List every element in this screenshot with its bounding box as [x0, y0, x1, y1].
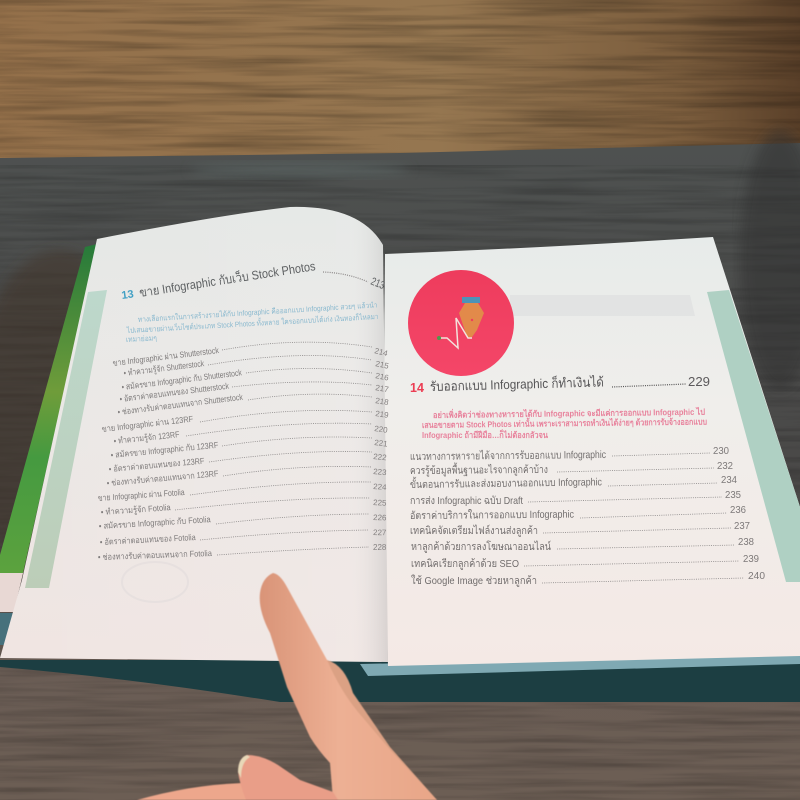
contents list chapter 13: • ทำความรู้จัก Shutterstock	[123, 358, 205, 379]
contents list chapter 13: • ช่องทางรับค่าตอบแทนจาก Shutterstock	[117, 392, 244, 417]
hand: pointing finger	[137, 573, 437, 800]
contents list chapter 14: ใช้ Google Image ช่วยหาลูกค้า	[411, 574, 537, 587]
contents list chapter 13: 224	[373, 482, 387, 492]
contents list chapter 13: 223	[373, 467, 387, 477]
right page tab strip	[707, 290, 800, 582]
contents list chapter 14: เทคนิคเรียกลูกค้าด้วย SEO	[411, 557, 519, 570]
contents list chapter 13	[97, 342, 390, 562]
contents list chapter 13: 214	[374, 346, 389, 358]
contents list chapter 13: • อัตราค่าตอบแทนของ Fotolia	[100, 532, 196, 547]
right page contents	[410, 372, 765, 587]
chapter 13 intro: ไปเสนอขายผ่านเว็บไซต์ประเภท Stock Photos ทั้งหลาย ใครออกแบบได้เก่ง เงินทองก็ไหลมา	[126, 311, 379, 335]
contents list chapter 14: 230	[713, 446, 729, 457]
faint show-through	[510, 295, 695, 316]
contents list chapter 13: • อัตราค่าตอบแทนของ 123RF	[108, 456, 205, 474]
chapter 13 heading: 213	[369, 276, 386, 292]
contents list chapter 14: 234	[721, 475, 737, 486]
chapter 13 heading: ขาย Infographic กับเว็บ Stock Photos	[138, 258, 316, 300]
chapter 13 intro: ทางเลือกแรกในการสร้างรายได้กับ Infographic คือออกแบบ Infographic สวยๆ แล้วนำ	[138, 300, 378, 324]
faint watermark blob	[122, 562, 188, 602]
chapter 14 intro	[422, 405, 707, 440]
contents list chapter 13: • ช่องทางรับค่าตอบแทนจาก 123RF	[106, 468, 219, 488]
contents list chapter 13: • สมัครขาย Infographic กับ Shutterstock	[121, 367, 243, 392]
contents list chapter 13: • อัตราค่าตอบแทนของ Shutterstock	[119, 381, 230, 404]
contents list chapter 13: 215	[375, 359, 390, 371]
chapter 14 heading: รับออกแบบ Infographic ก็ทำเงินได้	[430, 372, 604, 394]
contents list chapter 13: ขาย Infographic ผ่าน Shutterstock	[112, 345, 220, 368]
contents list chapter 13: 216	[375, 371, 390, 383]
contents list chapter 14: แนวทางการหารายได้จากการรับออกแบบ Infographic	[410, 448, 606, 463]
contents list chapter 14: 235	[725, 490, 741, 501]
contents list chapter 13: • ทำความรู้จัก 123RF	[113, 429, 180, 447]
hand: thumb and second finger	[137, 755, 340, 800]
chapter 14 heading: 14	[410, 381, 424, 395]
contents list chapter 14	[410, 446, 765, 587]
contents list chapter 13: • สมัครขาย Infographic กับ Fotolia	[99, 514, 211, 531]
contents list chapter 13: • ทำความรู้จัก Fotolia	[100, 502, 171, 518]
green cover behind left page	[0, 244, 97, 573]
contents list chapter 13: 222	[373, 452, 388, 462]
contents list chapter 13: • ช่องทางรับค่าตอบแทนจาก Fotolia	[98, 548, 212, 562]
contents list chapter 13: 227	[373, 528, 387, 537]
book shadow	[0, 660, 800, 702]
chapter 13 heading: 13	[121, 288, 135, 302]
contents list chapter 13: 219	[375, 409, 390, 420]
left page tab strip	[25, 290, 107, 588]
contents list chapter 14: 240	[748, 571, 765, 582]
book cover edge: teal	[360, 655, 800, 676]
contents list chapter 13: 228	[373, 543, 387, 552]
contents list chapter 13: ขาย Infographic ผ่าน Fotolia	[97, 487, 185, 503]
chapter 14 heading: 229	[688, 374, 710, 389]
contents list chapter 13: • สมัครขาย Infographic กับ 123RF	[110, 440, 219, 460]
contents list chapter 14: ควรรู้ข้อมูลพื้นฐานอะไรจากลูกค้าบ้าง	[410, 462, 548, 477]
contents list chapter 14: การส่ง Infographic ฉบับ Draft	[410, 495, 523, 507]
contents list chapter 14: 238	[738, 537, 754, 548]
contents list chapter 14: 236	[730, 505, 746, 516]
contents list chapter 14: ขั้นตอนการรับและส่งมอบงานออกแบบ Infographic	[410, 474, 602, 491]
contents list chapter 13: ขาย Infographic ผ่าน 123RF	[101, 414, 194, 434]
under page and teal cover at left	[0, 573, 23, 645]
contents list chapter 13: 218	[375, 396, 390, 407]
chapter 14 intro: Infographic ถ้ามีฝีมือ…ก็ไม่ต้องกลัวจน	[422, 428, 548, 440]
contents list chapter 14: 239	[743, 554, 759, 565]
chapter 13 intro: เทมาย่อมๆ	[126, 333, 157, 344]
left page contents	[97, 258, 390, 562]
contents list chapter 14: อัตราค่าบริการในการออกแบบ Infographic	[410, 508, 574, 522]
contents list chapter 14: 232	[717, 461, 733, 472]
chapter 13 intro	[126, 300, 379, 344]
wood wall background	[0, 0, 800, 162]
contents list chapter 13: 221	[374, 438, 389, 449]
icon: pen nib in red circle	[408, 270, 514, 376]
contents list chapter 14: เทคนิคจัดเตรียมไฟล์งานส่งลูกค้า	[410, 524, 538, 537]
contents list chapter 13: 226	[373, 513, 387, 522]
contents list chapter 13: 220	[374, 424, 389, 435]
chapter 13 heading	[121, 258, 386, 302]
left page	[0, 207, 388, 662]
contents list chapter 14: หาลูกค้าด้วยการลงโฆษณาออนไลน์	[411, 540, 551, 553]
contents list chapter 13: 225	[373, 498, 387, 508]
chapter 14 heading	[410, 372, 710, 395]
chapter 14 intro: อย่าเพิ่งคิดว่าช่องทางหารายได้กับ Infographic จะมีแค่การออกแบบ Infographic ไป	[433, 405, 706, 420]
right page	[384, 237, 800, 666]
chapter 14 intro: เสนอขายตาม Stock Photos เท่านั้น เพราะเราสามารถทำเงินได้ง่ายๆ ด้วยการรับจ้างออกแบบ	[422, 415, 707, 430]
contents list chapter 14: 237	[734, 521, 750, 532]
contents list chapter 13: 217	[375, 383, 390, 394]
